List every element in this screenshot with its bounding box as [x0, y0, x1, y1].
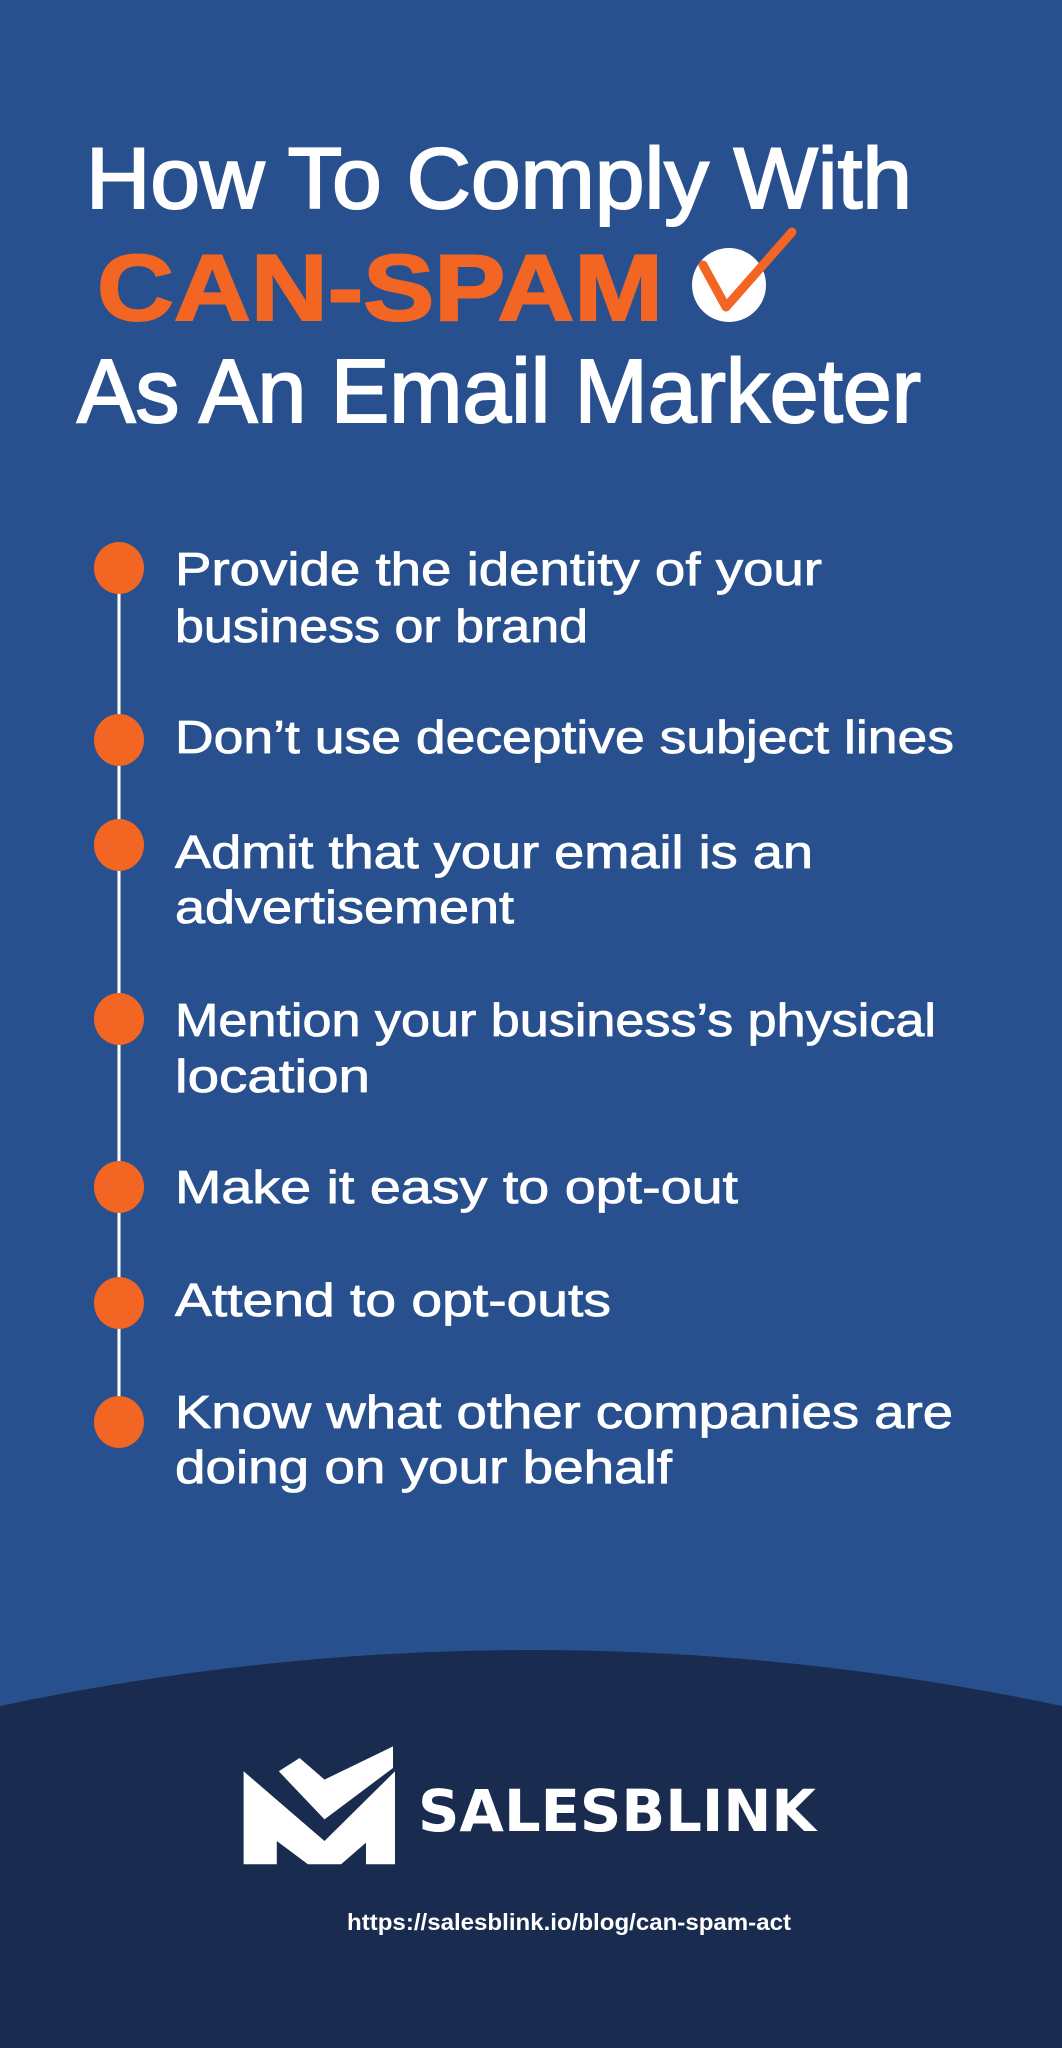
item 5: Make it easy to opt-out [175, 1161, 738, 1213]
item 1 [94, 542, 822, 652]
item 7: doing on your behalf [175, 1441, 672, 1493]
item 1: Provide the identity of your [175, 543, 822, 595]
footer panel [0, 1650, 1062, 2048]
item 4 [94, 993, 936, 1102]
item 3: Admit that your email is an [175, 826, 813, 878]
logo text: SALESBLINK [418, 1777, 818, 1845]
item 2: Don’t use deceptive subject lines [175, 711, 954, 763]
url: https://salesblink.io/blog/can-spam-act [347, 1909, 791, 1935]
item 4: Mention your business’s physical [175, 994, 936, 1046]
item 7 [94, 1386, 953, 1493]
item 3: advertisement [175, 881, 514, 933]
title [77, 131, 921, 442]
item 1: business or brand [175, 600, 588, 652]
icon: check circle [692, 232, 792, 322]
title line 2: CAN-SPAM: CAN-SPAM [97, 235, 663, 340]
timeline line [118, 568, 120, 1422]
item 3 [94, 819, 813, 933]
item 6: Attend to opt-outs [175, 1274, 611, 1326]
title line 3: As An Email Marketer [77, 342, 921, 442]
item 4: location [175, 1050, 370, 1102]
item 6 [94, 1274, 611, 1329]
timeline list [94, 542, 954, 1493]
logo icon [244, 1746, 395, 1864]
item 7: Know what other companies are [175, 1386, 953, 1438]
title line 1: How To Comply With [86, 131, 912, 227]
